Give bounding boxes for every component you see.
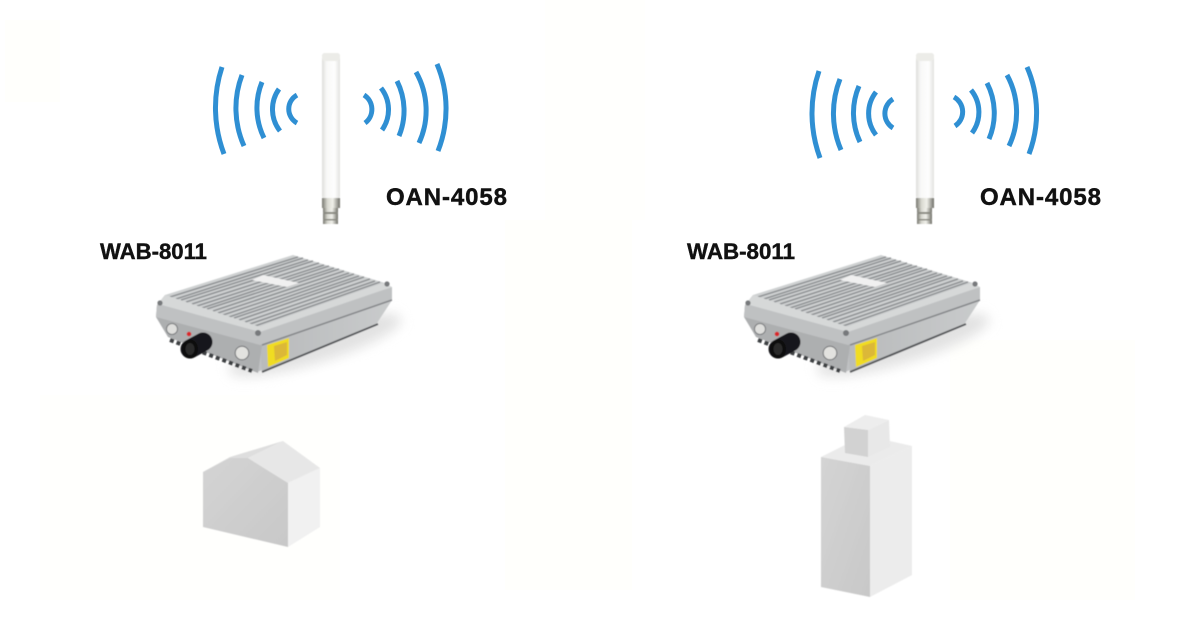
label: OAN-4058: OAN-4058 [980,184,1101,211]
signal waves: left antenna, left side [215,67,297,154]
icon: tall building [821,415,912,597]
label: WAB-8011: WAB-8011 [100,239,207,264]
antenna OAN-4058 [322,53,340,224]
label: WAB-8011: WAB-8011 [687,239,795,264]
device: WAB-8011 enclosure [156,255,406,389]
signal waves: right antenna, right side [954,67,1037,154]
signal waves: left antenna, right side [364,64,446,151]
panel: right deployment [687,53,1101,597]
label: OAN-4058: OAN-4058 [386,184,507,211]
panel: left deployment [100,53,507,547]
icon: house [203,441,320,547]
antenna OAN-4058 [916,53,934,224]
signal waves: right antenna, left side [812,71,893,158]
device: WAB-8011 enclosure [744,255,994,389]
